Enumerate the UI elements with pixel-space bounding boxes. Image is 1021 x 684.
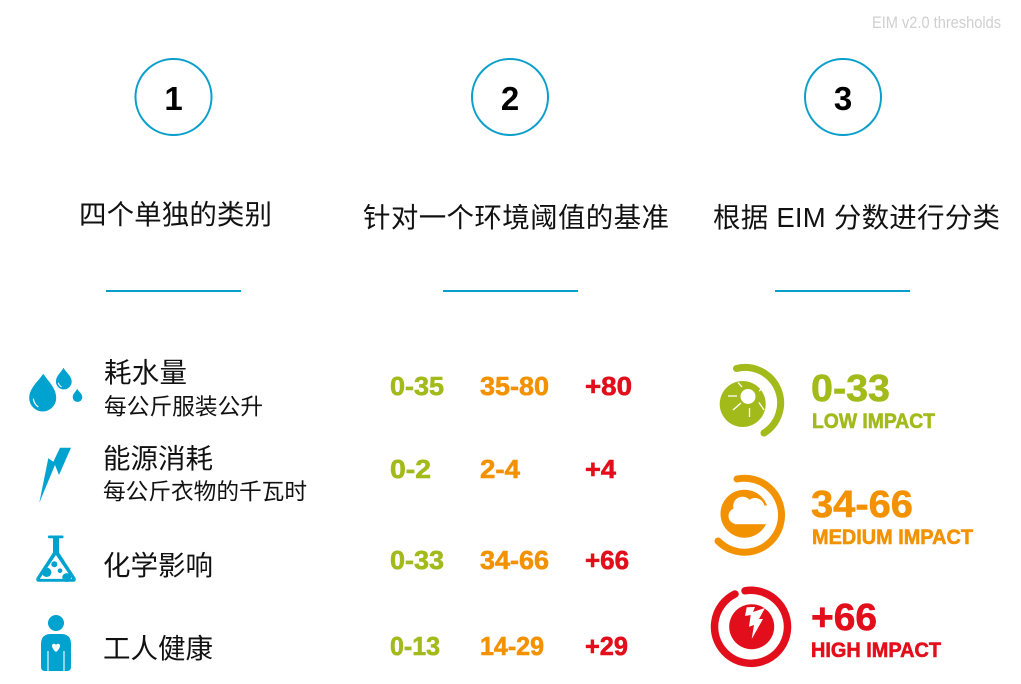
thresholds: worker health: +29 [585, 631, 628, 661]
icon: high impact bolt [715, 590, 788, 663]
heading: column 1: 四个单独的类别 [79, 199, 272, 230]
thresholds: water: +80 [585, 371, 632, 401]
impact score: medium: MEDIUM IMPACT [812, 526, 973, 549]
impact score: low: LOW IMPACT [812, 410, 935, 433]
thresholds: worker health: 0-13 [390, 631, 440, 661]
thresholds: chemicals: +66 [585, 545, 629, 575]
thresholds: water: 35-80 [480, 371, 549, 401]
icon: lightning bolt [39, 448, 71, 503]
sublabel: energy unit: 每公斤衣物的千瓦时 [103, 478, 307, 504]
thresholds: chemicals [390, 545, 629, 575]
step 3 badge [805, 59, 881, 135]
label: chemical impact: 化学影响 [103, 550, 213, 581]
thresholds: worker health: 14-29 [480, 631, 544, 661]
heading: column 2: 针对一个环境阈值的基准 [363, 202, 669, 233]
label: energy use: 能源消耗 [103, 443, 213, 474]
impact score: low: 0-33 [811, 368, 890, 410]
impact score: medium: 34-66 [811, 484, 913, 526]
icon: water drops [29, 368, 82, 411]
sublabel: water unit: 每公斤服装公升 [104, 394, 263, 420]
thresholds: worker health [390, 631, 628, 661]
icon: worker [41, 615, 71, 671]
icon: low impact sun [720, 367, 781, 433]
label: water consumption: 耗水量 [104, 357, 187, 388]
thresholds: water: 0-35 [390, 371, 444, 401]
step 2 badge [472, 59, 548, 135]
thresholds: chemicals: 34-66 [480, 545, 549, 575]
heading: column 3: 根据 EIM 分数进行分类 [713, 202, 1000, 233]
thresholds: energy: +4 [585, 454, 617, 484]
thresholds: water [390, 371, 632, 401]
thresholds: energy: 0-2 [390, 454, 431, 484]
icon: medium impact cloud [718, 478, 782, 552]
step 1 badge [136, 59, 212, 135]
label: worker health: 工人健康 [103, 633, 213, 664]
thresholds: chemicals: 0-33 [390, 545, 444, 575]
step 3 badge: 3 [834, 80, 852, 117]
impact score: high: HIGH IMPACT [811, 639, 941, 662]
impact score: high: +66 [811, 597, 877, 639]
thresholds: energy: 2-4 [480, 454, 521, 484]
impact score: low [811, 368, 935, 433]
step 2 badge: 2 [501, 80, 519, 117]
version note: EIM v2.0 thresholds [872, 13, 1001, 32]
impact score: high [811, 597, 941, 662]
icon: flask [36, 536, 76, 582]
impact score: medium [811, 484, 973, 549]
step 1 badge: 1 [164, 80, 183, 117]
thresholds: energy [390, 454, 617, 484]
